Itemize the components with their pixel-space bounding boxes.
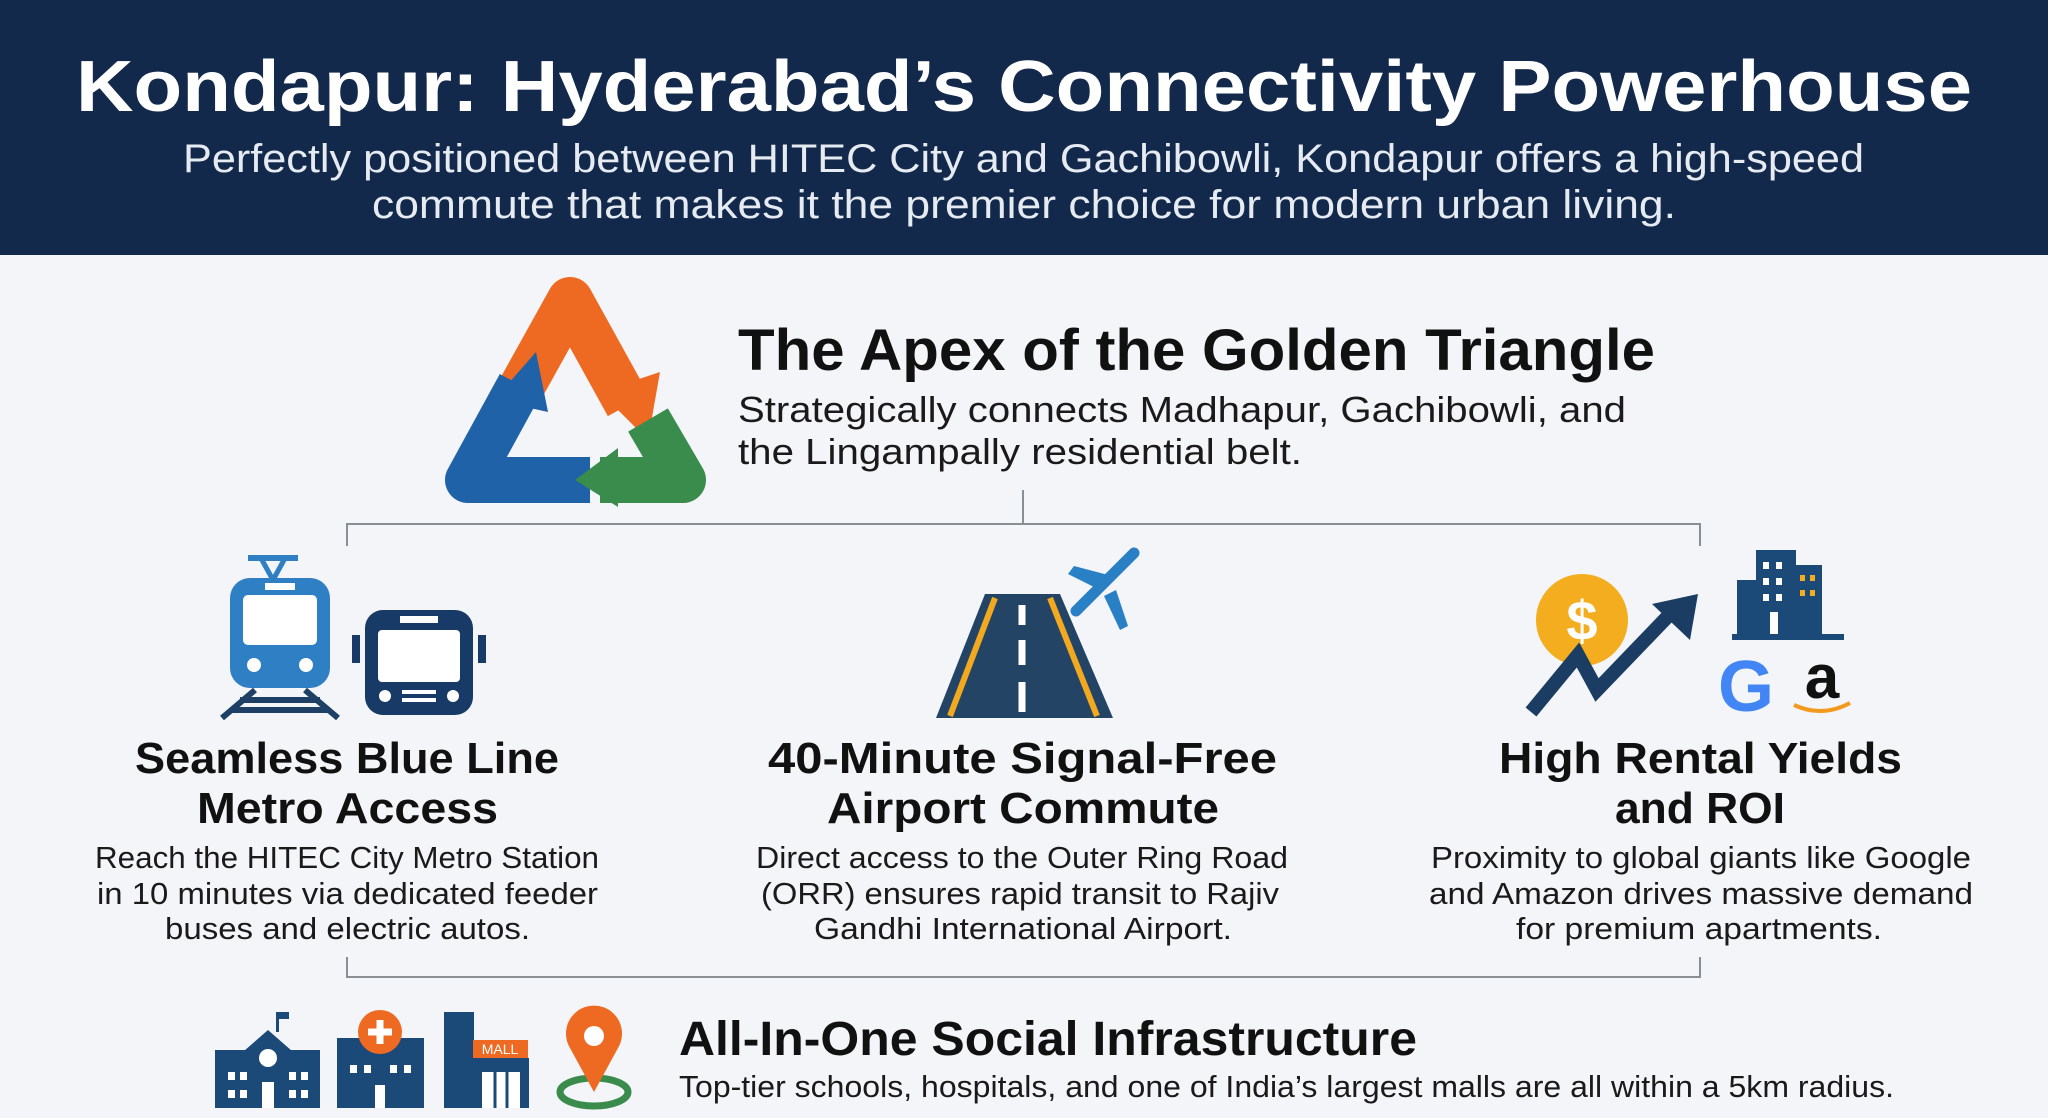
icon: rental yields: G (1718, 647, 1774, 727)
column: airport: 40-Minute Signal-Free (768, 734, 1277, 783)
column: metro: Metro Access (197, 784, 498, 833)
column: rental: High Rental Yields (1499, 734, 1902, 783)
heading: social infrastructure: All-In-One Social Infrastructure (679, 1013, 1417, 1066)
subtitle: Perfectly positioned between HITEC City and Gachibowli, Kondapur offers a high-speed (183, 137, 1864, 181)
column: airport: Airport Commute (827, 784, 1219, 833)
header (0, 0, 2048, 255)
subtitle: commute that makes it the premier choice for modern urban living. (372, 183, 1676, 227)
text: social infrastructure: Top-tier schools, hospitals, and one of India’s largest malls are all within a 5km radius. (679, 1069, 1894, 1104)
column: airport: Direct access to the Outer Ring Road (756, 840, 1288, 875)
column: airport (756, 734, 1288, 946)
title: Kondapur: Hyderabad’s Connectivity Powerhouse (76, 47, 1972, 127)
icon: bus (352, 610, 486, 715)
column: metro: Reach the HITEC City Metro Station (95, 840, 599, 875)
column: rental: and Amazon drives massive demand (1429, 876, 1973, 911)
icon: rental yields (1531, 550, 1850, 727)
connectors (347, 490, 1700, 977)
icon: rental yields: a (1805, 643, 1840, 712)
subtitle (183, 137, 1864, 227)
text: apex description: the Lingampally residential belt. (738, 431, 1302, 472)
icons: social infrastructure: MALL (482, 1041, 518, 1057)
column: airport: Gandhi International Airport. (814, 911, 1232, 946)
column: metro (95, 734, 599, 946)
column: rental: and ROI (1615, 784, 1785, 833)
icon: golden triangle arrows (468, 300, 683, 507)
text: apex description (738, 389, 1626, 472)
column: metro: in 10 minutes via dedicated feeder (97, 876, 598, 911)
column: airport: (ORR) ensures rapid transit to Rajiv (761, 876, 1280, 911)
icon: road and plane (936, 553, 1134, 718)
icon: metro train (222, 555, 338, 718)
icons: social infrastructure (215, 1006, 628, 1108)
icon: rental yields: $ (1566, 589, 1598, 652)
column: rental (1429, 734, 1973, 946)
column: rental: for premium apartments. (1516, 911, 1882, 946)
heading: apex: The Apex of the Golden Triangle (738, 318, 1655, 383)
column: metro: Seamless Blue Line (135, 734, 559, 783)
column: metro: buses and electric autos. (165, 911, 530, 946)
text: apex description: Strategically connects Madhapur, Gachibowli, and (738, 389, 1626, 430)
column: rental: Proximity to global giants like Google (1431, 840, 1971, 875)
